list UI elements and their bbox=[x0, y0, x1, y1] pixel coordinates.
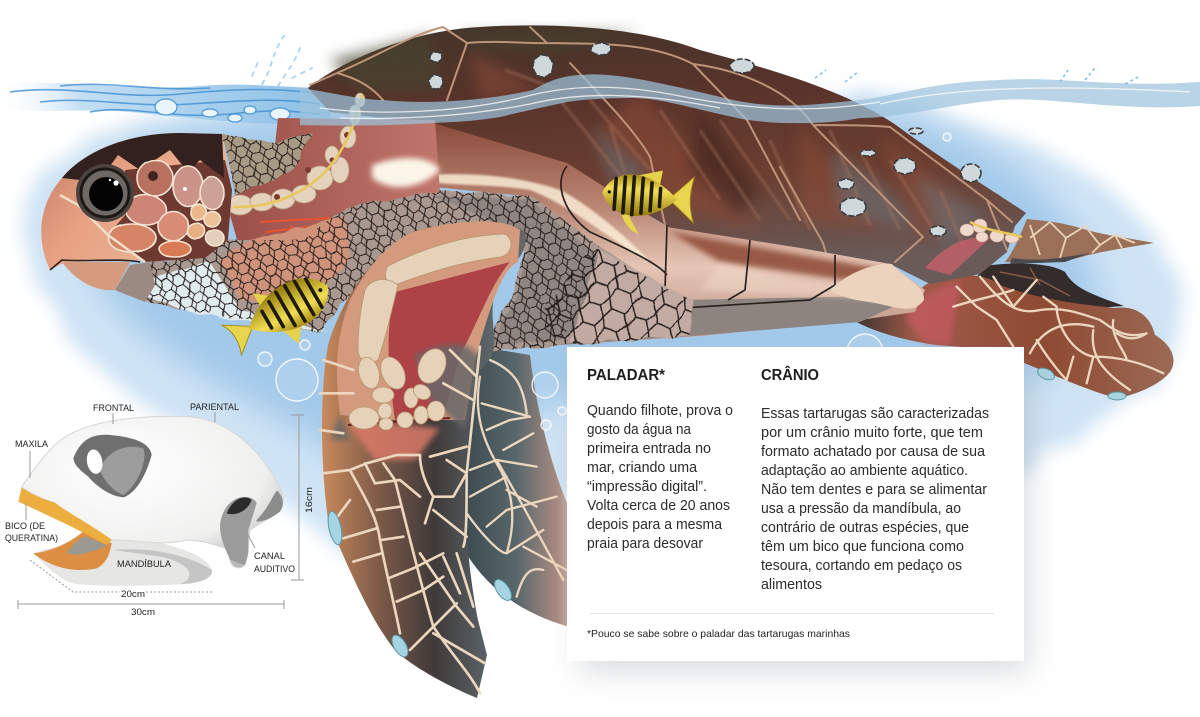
text: crânio: têm um bico que funciona como bbox=[761, 539, 964, 555]
text: crânio bbox=[761, 406, 989, 593]
femur bone bbox=[830, 264, 924, 309]
flipper bones bbox=[349, 234, 511, 430]
footnote: *Pouco se sabe sobre o paladar das tartarugas marinhas bbox=[587, 628, 850, 640]
skull diagram bbox=[5, 402, 315, 618]
heading: paladar: PALADAR* bbox=[587, 367, 666, 384]
skull labels: CANAL bbox=[254, 551, 285, 562]
carapace scute lines bbox=[310, 27, 1012, 277]
text: paladar: “impressão digital”. bbox=[587, 479, 707, 495]
eye socket bbox=[73, 435, 152, 497]
text: crânio: alimentos bbox=[761, 577, 822, 593]
text: crânio: tesoura, cortando em pedaço os bbox=[761, 558, 962, 574]
shoulder scales bbox=[115, 132, 695, 352]
skull labels: MANDÍBULA bbox=[117, 559, 172, 570]
skull labels: QUERATINA) bbox=[5, 533, 58, 544]
skull labels: 16cm bbox=[304, 487, 315, 513]
text: crânio: formato achatado por causa de sua bbox=[761, 444, 986, 460]
lower beak bbox=[33, 530, 112, 570]
rear flipper bbox=[853, 275, 1174, 400]
text: paladar: gosto da água na bbox=[587, 422, 692, 438]
beak line bbox=[50, 260, 140, 270]
rear flipper tile lines bbox=[953, 277, 1163, 390]
eye bbox=[76, 164, 134, 222]
tail bbox=[1005, 219, 1154, 264]
body: lower shell band bbox=[427, 123, 925, 345]
cranium bbox=[22, 416, 283, 568]
barnacles bbox=[429, 43, 981, 236]
text: paladar: depois para a mesma bbox=[587, 517, 723, 533]
skull labels bbox=[5, 402, 315, 618]
upper beak bbox=[18, 487, 112, 545]
background: blue water wash bbox=[32, 100, 1178, 590]
fish: lower left bbox=[215, 259, 346, 373]
heading: crânio: CRÂNIO bbox=[761, 365, 819, 384]
text: crânio: contrário de outras espécies, que bbox=[761, 520, 969, 536]
text panel bbox=[567, 347, 1028, 671]
skull labels: FRONTAL bbox=[93, 403, 134, 414]
text: paladar: praia para desovar bbox=[587, 536, 703, 552]
neck muscle bbox=[230, 118, 440, 250]
text: paladar: primeira entrada no bbox=[587, 441, 711, 457]
skull labels: BICO (DE bbox=[5, 521, 45, 532]
carapace shell streaks bbox=[505, 70, 965, 250]
text: crânio: Não tem dentes e para se alimentar bbox=[761, 482, 987, 498]
skull labels: AUDITIVO bbox=[254, 564, 295, 575]
skull labels: MAXILA bbox=[15, 439, 49, 450]
water band across shell bbox=[300, 68, 1200, 126]
neck gland bbox=[227, 93, 365, 215]
waterline: left surface streaks and splash bbox=[0, 36, 330, 124]
head scale base bbox=[108, 160, 232, 262]
back flipper tile lines bbox=[467, 360, 567, 597]
text: paladar bbox=[587, 403, 733, 552]
ear opening bbox=[220, 497, 257, 565]
bubbles bbox=[258, 133, 951, 430]
lower jaw bbox=[33, 539, 212, 586]
flipper muscle bbox=[389, 262, 510, 420]
fish: upper right bbox=[600, 166, 697, 238]
skull labels: PARIENTAL bbox=[190, 402, 239, 413]
skull illustration bbox=[18, 416, 283, 586]
head bbox=[41, 133, 232, 302]
text: paladar: mar, criando uma bbox=[587, 460, 698, 476]
text: crânio: usa a pressão da mandíbula, ao bbox=[761, 501, 961, 517]
flipper tile lines bbox=[320, 347, 485, 693]
crown bbox=[62, 133, 224, 180]
skull labels: 30cm bbox=[131, 607, 155, 618]
text: crânio: adaptação ao ambiente aquático. bbox=[761, 463, 968, 479]
head scales bbox=[108, 160, 224, 257]
back fore-flipper bbox=[455, 345, 575, 628]
text: paladar: Quando filhote, prova o bbox=[587, 403, 733, 419]
front flipper bbox=[320, 221, 526, 698]
dimension lines bbox=[18, 412, 304, 609]
skull labels: 20cm bbox=[121, 589, 145, 600]
carapace bbox=[308, 25, 1026, 284]
rear gland bbox=[925, 219, 1022, 275]
text: paladar: Volta cerca de 20 anos bbox=[587, 498, 730, 514]
text: crânio: Essas tartarugas são caracterizadas bbox=[761, 406, 989, 422]
rear dark flipper bbox=[960, 264, 1124, 312]
text: crânio: por um crânio muito forte, que tem bbox=[761, 425, 983, 441]
lower jaw bbox=[62, 262, 130, 290]
